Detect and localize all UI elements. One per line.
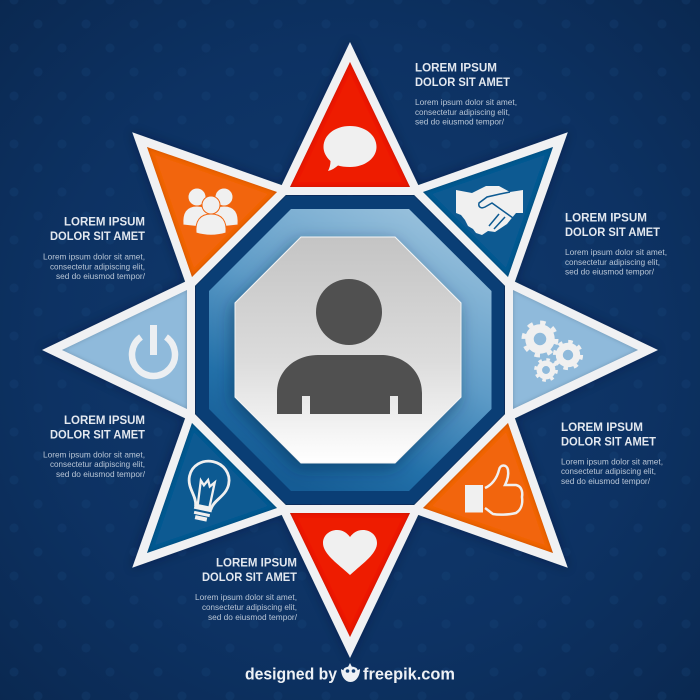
text block: upper right: consectetur adipiscing elit, <box>565 257 660 267</box>
icon: thumbs up <box>465 466 522 515</box>
panel: bottom right thumbs up <box>423 423 553 553</box>
text block: lower left: Lorem ipsum dolor sit amet, <box>43 450 145 460</box>
inner grey octagon <box>235 237 461 463</box>
icon: person <box>277 279 422 414</box>
icon: gears <box>524 322 582 380</box>
panel: top right handshake <box>423 147 553 277</box>
text block: upper left: DOLOR SIT AMET <box>50 230 145 243</box>
text block: bottom: Lorem ipsum dolor sit amet, <box>195 592 297 602</box>
footer credit: freepik.com <box>363 666 455 684</box>
text block: top: sed do eiusmod tempor/ <box>415 116 505 126</box>
panel: bottom left bulb <box>147 423 277 553</box>
icon: handshake <box>456 186 523 235</box>
text block: upper right <box>565 212 667 276</box>
text block: lower right: LOREM IPSUM <box>561 421 643 434</box>
footer credit: designed by <box>245 666 338 684</box>
text block: top: consectetur adipiscing elit, <box>415 107 510 117</box>
text block: upper left <box>43 216 146 281</box>
text block: bottom: DOLOR SIT AMET <box>202 571 297 584</box>
text block: lower left: sed do eiusmod tempor/ <box>56 469 146 479</box>
icon: freepik logo <box>341 663 360 682</box>
text block: upper left: sed do eiusmod tempor/ <box>56 271 146 281</box>
text block: top: LOREM IPSUM <box>415 62 497 74</box>
outer dark octagon <box>196 196 504 504</box>
text block: lower right: Lorem ipsum dolor sit amet, <box>561 456 663 466</box>
panel: bottom heart <box>290 513 410 637</box>
text block: lower right: DOLOR SIT AMET <box>561 436 656 448</box>
text block: lower right: consectetur adipiscing elit, <box>561 466 656 476</box>
text block: top <box>415 62 517 126</box>
text block: bottom: LOREM IPSUM <box>216 556 297 570</box>
text block: upper right: sed do eiusmod tempor/ <box>565 266 655 276</box>
text block: upper right: DOLOR SIT AMET <box>565 226 660 239</box>
panel: top speech <box>290 62 410 187</box>
text block: upper right: LOREM IPSUM <box>565 212 647 224</box>
text block: lower right <box>561 421 663 486</box>
panel: left power <box>62 290 187 409</box>
text block: lower left: consectetur adipiscing elit, <box>50 459 145 469</box>
text block: lower left: LOREM IPSUM <box>64 414 145 427</box>
text block: upper left: Lorem ipsum dolor sit amet, <box>43 252 145 262</box>
text block: upper right: Lorem ipsum dolor sit amet, <box>565 247 667 257</box>
text block: lower right: sed do eiusmod tempor/ <box>561 476 651 486</box>
panel: right gears <box>513 290 638 409</box>
icon: power <box>132 325 175 376</box>
text block: lower left <box>43 414 146 479</box>
icon: heart <box>323 530 377 575</box>
panel: top left people <box>147 147 277 277</box>
middle blue octagon <box>209 209 492 491</box>
text block: top: DOLOR SIT AMET <box>415 76 510 89</box>
icon: speech bubble <box>324 126 376 171</box>
icon: people <box>183 188 238 235</box>
text block: bottom: sed do eiusmod tempor/ <box>208 612 298 622</box>
star white frame <box>42 42 658 658</box>
text block: upper left: LOREM IPSUM <box>64 216 145 228</box>
text block: lower left: DOLOR SIT AMET <box>50 428 145 442</box>
text block: upper left: consectetur adipiscing elit, <box>50 262 145 272</box>
icon: light bulb <box>181 457 233 523</box>
text block: top: Lorem ipsum dolor sit amet, <box>415 97 517 107</box>
text block: bottom <box>195 556 298 622</box>
footer credit <box>245 663 455 684</box>
text block: bottom: consectetur adipiscing elit, <box>202 602 297 612</box>
